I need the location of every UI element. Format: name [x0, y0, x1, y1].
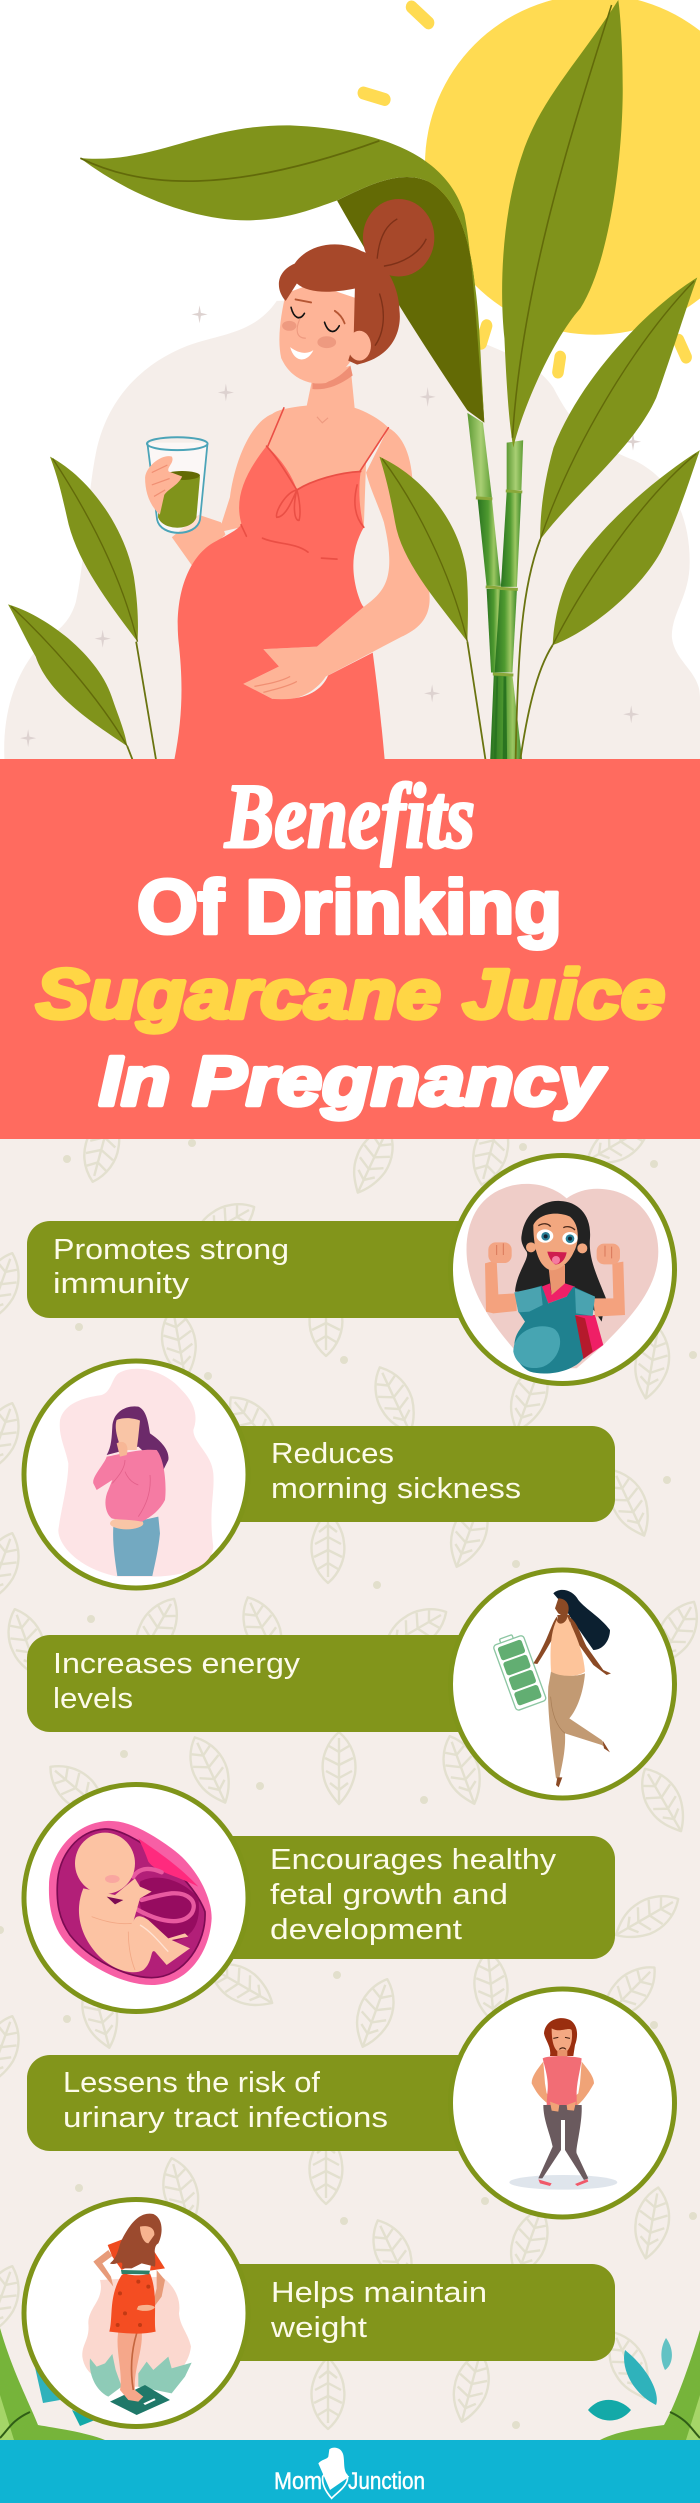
left upper leaf	[50, 457, 138, 642]
sun	[425, 0, 700, 335]
benefit 5 text	[63, 2067, 388, 2134]
benefit 6 text	[270, 2277, 487, 2344]
left lower leaf	[8, 604, 127, 746]
hand details	[254, 676, 297, 692]
ear	[348, 331, 371, 361]
benefit 2 text: morning sickness	[271, 1473, 521, 1505]
pregnant woman with glass	[145, 199, 434, 761]
icon: fetus in womb	[49, 1821, 212, 1985]
leaf and dot pattern	[0, 1108, 700, 2429]
benefit 1: promotes strong immunity	[27, 1156, 674, 1384]
neck	[306, 366, 355, 410]
benefit 6: helps maintain weight	[24, 2200, 615, 2426]
right upper leaf	[540, 278, 697, 540]
benefit 4 text: fetal growth and	[270, 1879, 508, 1911]
centre leaf over the arm	[379, 457, 468, 642]
benefit 1 text: Promotes strong	[53, 1234, 289, 1266]
benefit 2 circle	[24, 1361, 248, 1588]
icon: flexing pregnant woman	[467, 1184, 658, 1374]
sparkles	[20, 305, 641, 747]
top illustration background	[0, 0, 700, 760]
benefit 4: encourages healthy fetal growth	[24, 1784, 615, 2012]
icon: woman with urinary discomfort	[509, 2018, 617, 2190]
logo: mother and child	[318, 2448, 349, 2498]
benefit 3 circle	[450, 1570, 674, 1798]
icon: pregnant woman on scale	[82, 2214, 192, 2415]
footer bar	[0, 2440, 700, 2503]
benefit 6 circle	[24, 2200, 248, 2426]
large arching leaf	[80, 125, 484, 423]
benefit 4 text: Encourages healthy	[270, 1844, 557, 1876]
logo wordmark: Mom	[274, 2468, 322, 2495]
logo wordmark: Junction	[348, 2468, 425, 2495]
icon: nauseous pregnant woman	[58, 1369, 214, 1577]
benefit 2: reduces morning sickness	[24, 1361, 615, 1588]
glass of juice	[147, 437, 208, 533]
benefit 3 text: Increases energy	[53, 1648, 301, 1680]
benefit 5 text: Lessens the risk of	[63, 2067, 321, 2099]
dress details	[241, 408, 388, 559]
benefit 5 circle	[450, 1989, 674, 2217]
section background	[0, 1130, 700, 2450]
title banner	[0, 759, 700, 1139]
benefit 3: increases energy levels	[27, 1570, 674, 1798]
benefit 1 text: immunity	[53, 1268, 190, 1300]
title line: Benefits: Benefits	[224, 765, 475, 867]
benefit 3 text: levels	[53, 1683, 133, 1715]
benefit 6 text: weight	[270, 2312, 367, 2344]
face	[279, 284, 357, 383]
dress	[174, 446, 385, 761]
right lower leaf	[553, 450, 700, 645]
benefit 5 text: urinary tract infections	[63, 2102, 388, 2134]
benefit 6 text: Helps maintain	[271, 2277, 487, 2309]
title line: Sugarcane Juice: Sugarcane Juice	[36, 955, 665, 1033]
icon: woman with full battery	[492, 1590, 611, 1787]
hair bun	[363, 199, 434, 277]
benefit 1 text	[53, 1234, 289, 1300]
benefit 3 text	[53, 1648, 301, 1715]
right arm	[243, 428, 430, 700]
bamboo stems	[467, 413, 523, 761]
benefit 4 text	[270, 1844, 557, 1946]
soft background blob	[4, 298, 700, 761]
benefit 1 circle	[450, 1156, 674, 1384]
hero illustration	[4, 0, 700, 761]
sun rays	[363, 7, 686, 372]
stems of leaves	[127, 540, 553, 761]
hand holding glass	[145, 456, 182, 515]
left forearm	[172, 515, 225, 566]
chest and shoulder	[219, 405, 388, 532]
hair	[279, 244, 400, 365]
eyes, brows, cheeks, smile	[282, 299, 345, 359]
title line: In Pregnancy: In Pregnancy	[99, 1042, 607, 1120]
benefit 5: lessens risk of urinary tract infections	[27, 1989, 674, 2217]
logo wordmark	[274, 2468, 425, 2495]
tall leaf	[502, 0, 623, 448]
benefit 4 text: development	[270, 1914, 462, 1946]
benefit 2 text	[271, 1438, 521, 1505]
corner foliage	[0, 2328, 700, 2440]
title line: Of Drinking: Of Drinking	[137, 865, 562, 950]
benefit 4 circle	[24, 1784, 248, 2012]
benefit 2 text: Reduces	[271, 1438, 394, 1470]
